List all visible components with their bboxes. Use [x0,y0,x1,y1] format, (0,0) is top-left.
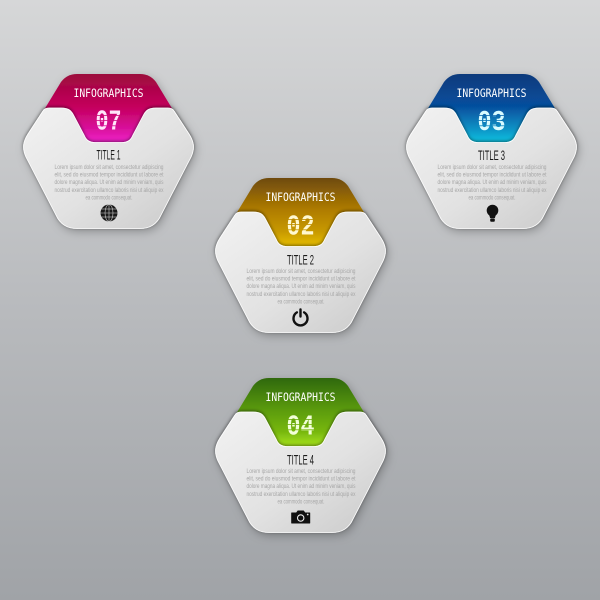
body text: dolore magna aliqua. Ut enim ad minim veniam, quis [246,283,356,290]
title: TITLE 3 [478,147,505,163]
hexagon body [24,108,193,228]
icon: light bulb [487,205,498,222]
body text: Lorem ipsum dolor sit amet, consectetur adipiscing [438,164,547,171]
body text: Lorem ipsum dolor sit amet, consectetur adipiscing [246,468,356,475]
card shape: header band and hexagon body [216,178,385,332]
header band [236,178,365,250]
header label: INFOGRAPHICS [74,86,144,100]
card 4: green [216,378,385,532]
body text: Lorem ipsum dolor sit amet, consectetur adipiscing [246,268,356,275]
card 1: pink: TITLE 1 [96,146,121,162]
body text: ea commodo consequat. [468,194,516,201]
number: 04 [286,410,314,444]
card 3: blue [407,74,576,228]
header label: INFOGRAPHICS [266,390,336,404]
body text: nostrud exercitation ullamco laboris nisi ut aliquip ex [54,187,164,194]
body text: Lorem ipsum dolor sit amet, consectetur adipiscing [54,164,164,171]
body text: dolore magna aliqua. Ut enim ad minim veniam, quis [54,179,164,186]
card 1: pink [24,74,193,228]
body text: nostrud exercitation ullamco laboris nisi ut aliquip ex [438,187,547,194]
header label: INFOGRAPHICS [266,190,336,204]
hexagon body [407,108,576,228]
body text: dolore magna aliqua. Ut enim ad minim veniam, quis [246,483,356,490]
body text: nostrud exercitation ullamco laboris nisi ut aliquip ex [246,291,356,298]
card shape: header band and hexagon body [216,378,385,532]
hexagon body [216,412,385,532]
body text: elit, sed do eiusmod tempor incididunt ut labore et [246,276,356,283]
body text: nostrud exercitation ullamco laboris nisi ut aliquip ex [246,491,356,498]
number: 03 [478,106,506,139]
title: TITLE 4 [287,452,314,468]
body text: elit, sed do eiusmod tempor incididunt ut labore et [54,172,164,179]
header band [236,378,365,450]
body text: ea commodo consequat. [86,194,133,201]
card 2: gold [216,178,385,332]
icon: power [294,310,308,325]
body text: elit, sed do eiusmod tempor incididunt ut labore et [246,476,356,483]
body text: ea commodo consequat. [278,498,325,505]
header band [44,74,173,146]
header band [427,74,556,146]
card shape: header band and hexagon body [24,74,193,228]
number: 07 [96,106,122,138]
icon: camera [291,510,310,524]
body text [54,164,164,201]
body text [438,164,547,201]
body text [246,468,356,505]
body text [246,268,356,305]
body text: elit, sed do eiusmod tempor incididunt ut labore et [438,172,547,179]
body text: dolore magna aliqua. Ut enim ad minim veniam, quis [438,179,547,186]
header label: INFOGRAPHICS [456,86,527,100]
icon: globe [100,204,118,222]
hexagon body [216,212,385,332]
card shape: header band and hexagon body [407,74,576,228]
title: TITLE 2 [287,252,314,268]
body text: ea commodo consequat. [278,298,325,305]
number: 02 [286,210,314,244]
